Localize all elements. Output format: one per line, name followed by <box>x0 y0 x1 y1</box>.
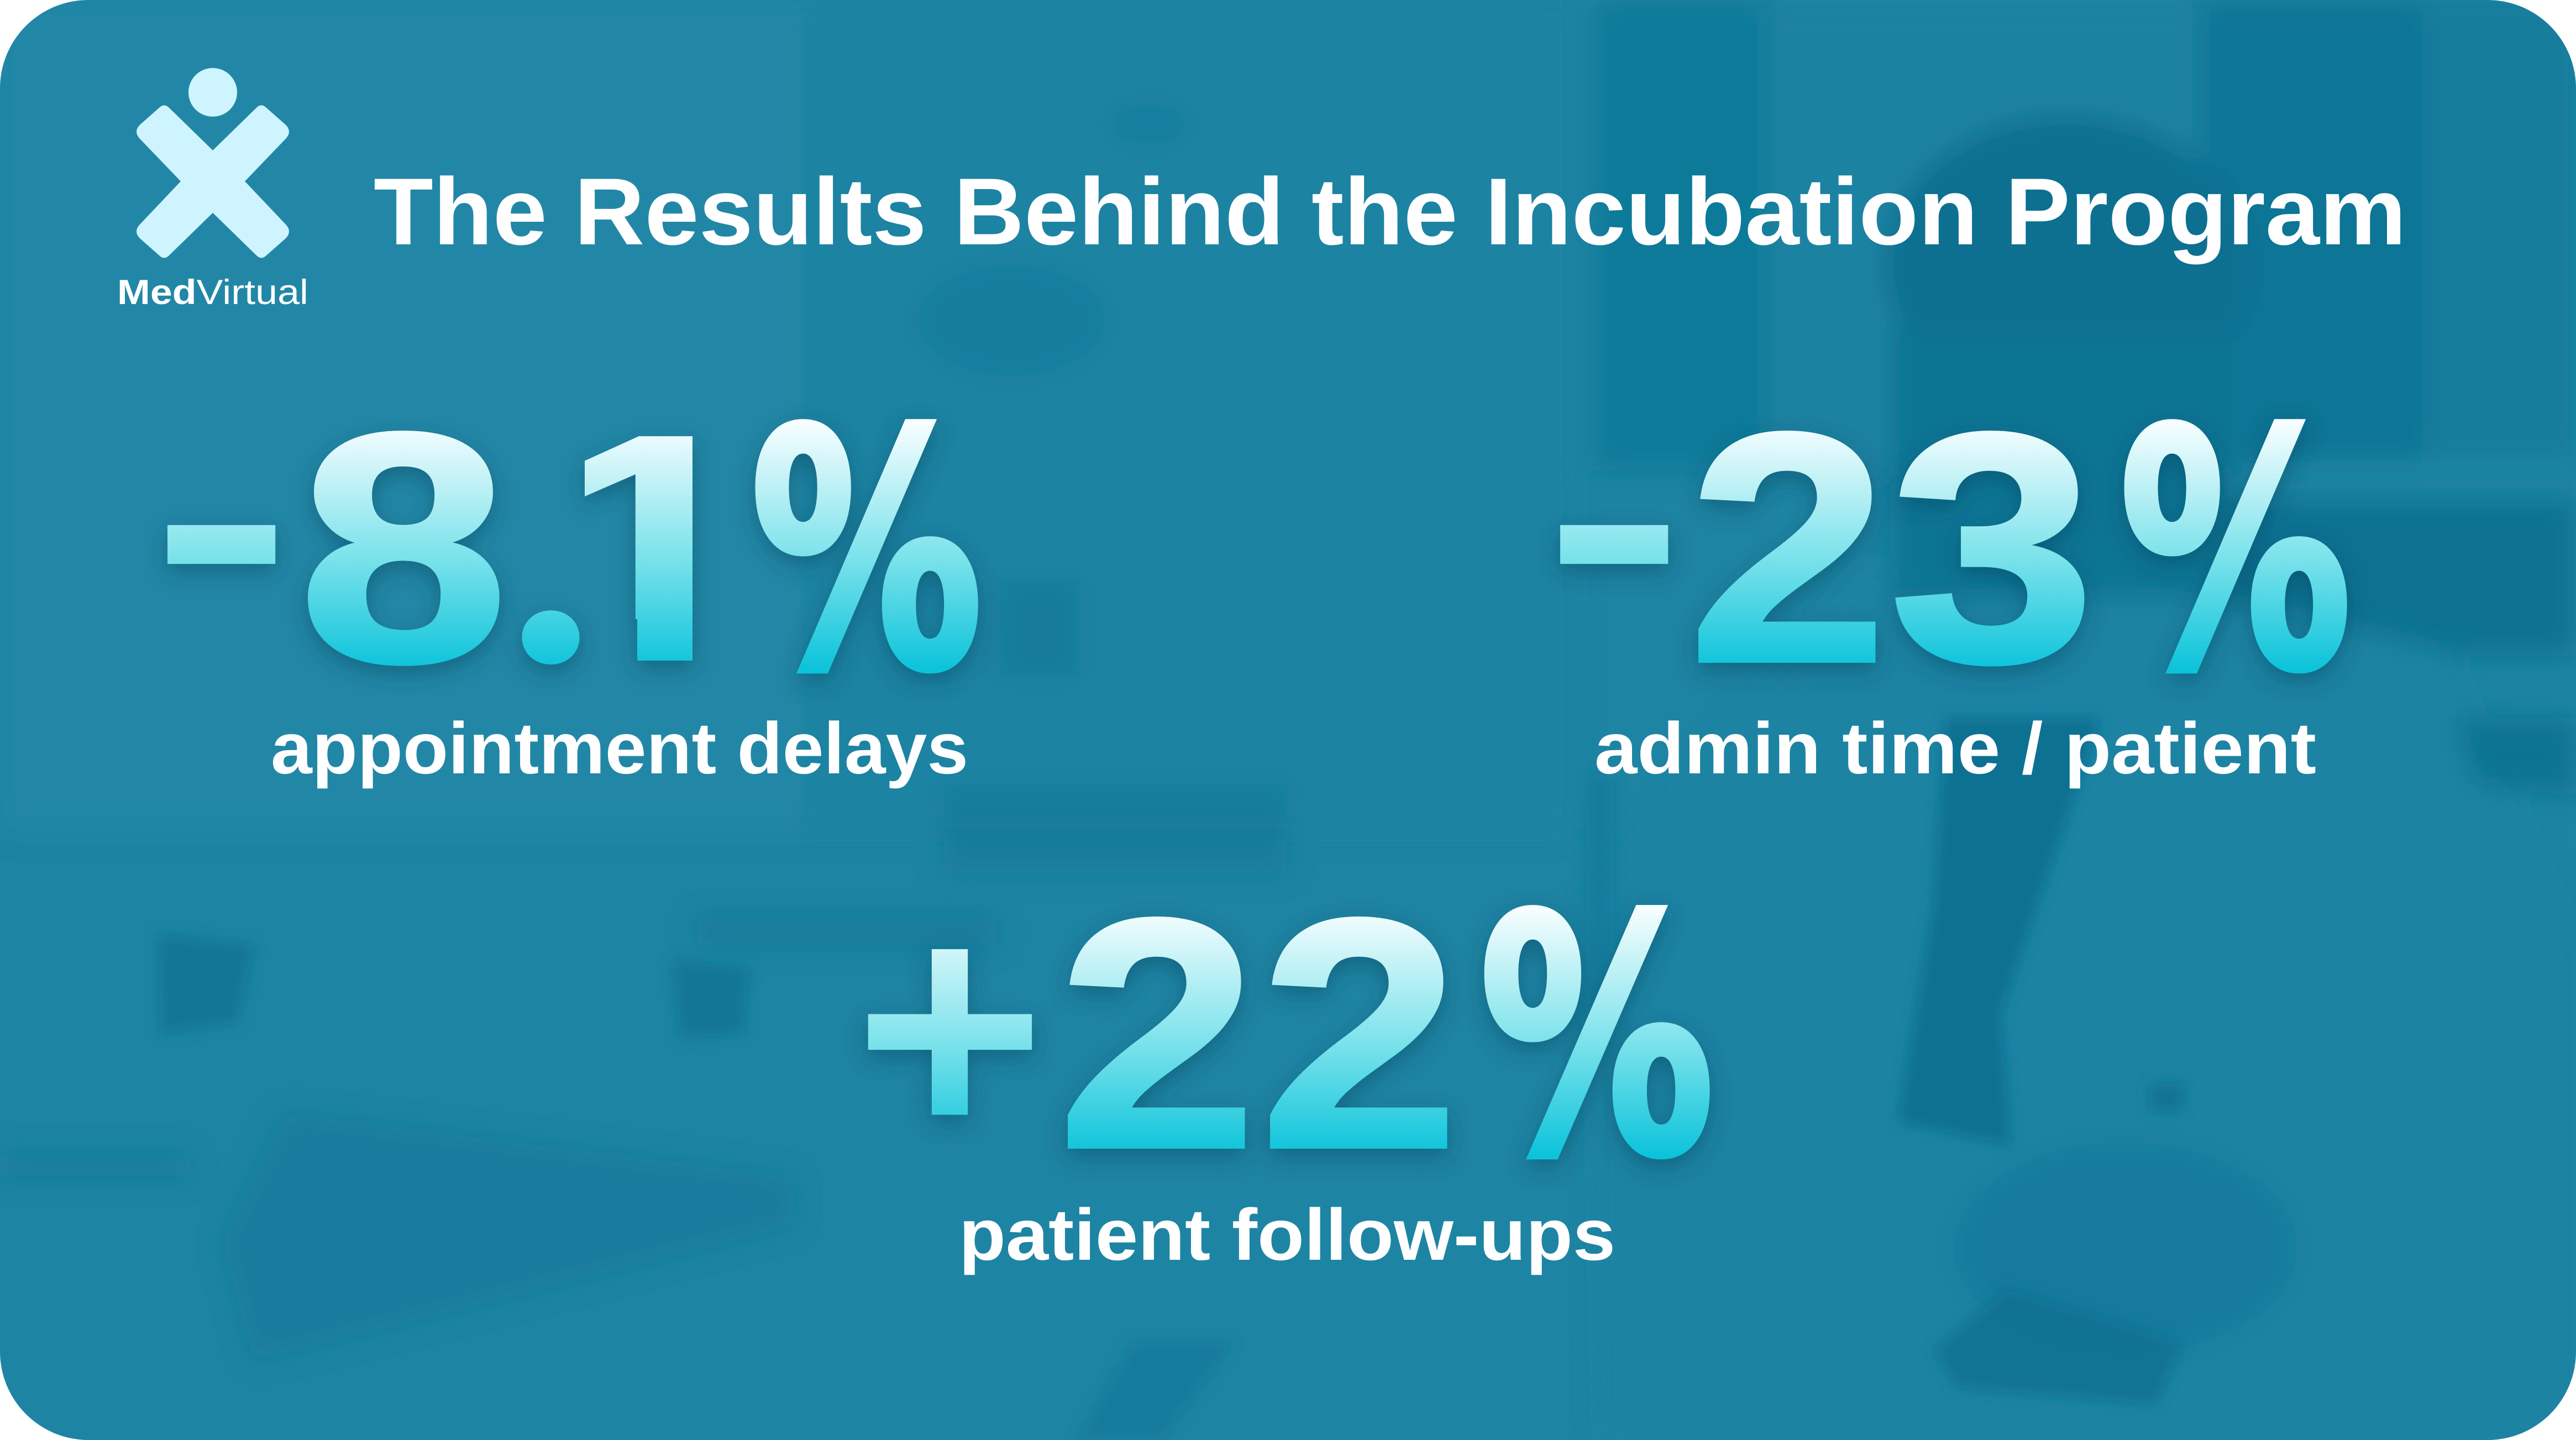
stat: +22% patient follow-ups <box>854 846 1714 1275</box>
stat: -23% admin time / patient <box>1544 334 2352 789</box>
number: -23% <box>1544 334 2352 742</box>
title: The Results Behind the Incubation Program <box>374 159 2406 265</box>
number: -23%: % <box>2119 363 2352 742</box>
logo: MedVirtual <box>117 68 308 312</box>
number: -8.1%: . <box>500 333 602 742</box>
number: -8.1%: - <box>151 334 292 699</box>
number: -8.1%: 8 <box>298 366 508 730</box>
number: -23%: 2 <box>1688 366 1887 730</box>
number: -8.1%: % <box>751 363 983 742</box>
number: +22%: + <box>854 846 1045 1210</box>
number: -8.1% <box>160 419 985 688</box>
logo wordmark: Med Virtual <box>117 273 308 312</box>
number: +22%: 2 <box>1058 852 1257 1216</box>
number: +22%: % <box>1480 849 1714 1228</box>
number: +22% <box>854 846 1714 1228</box>
icon: person X mark <box>137 68 289 258</box>
number: -23%: 3 <box>1890 366 2095 730</box>
number: -23%: - <box>1544 334 1685 699</box>
label: patient follow-ups: patient follow-ups <box>959 1194 1615 1275</box>
number: +22%: 2 <box>1260 852 1459 1216</box>
number: -8.1%: 1 <box>527 366 786 730</box>
stat: -8.1% appointment delays <box>160 419 985 788</box>
label: admin time / patient: admin time / patient <box>1594 708 2316 789</box>
label: appointment delays: appointment delays <box>271 708 968 789</box>
